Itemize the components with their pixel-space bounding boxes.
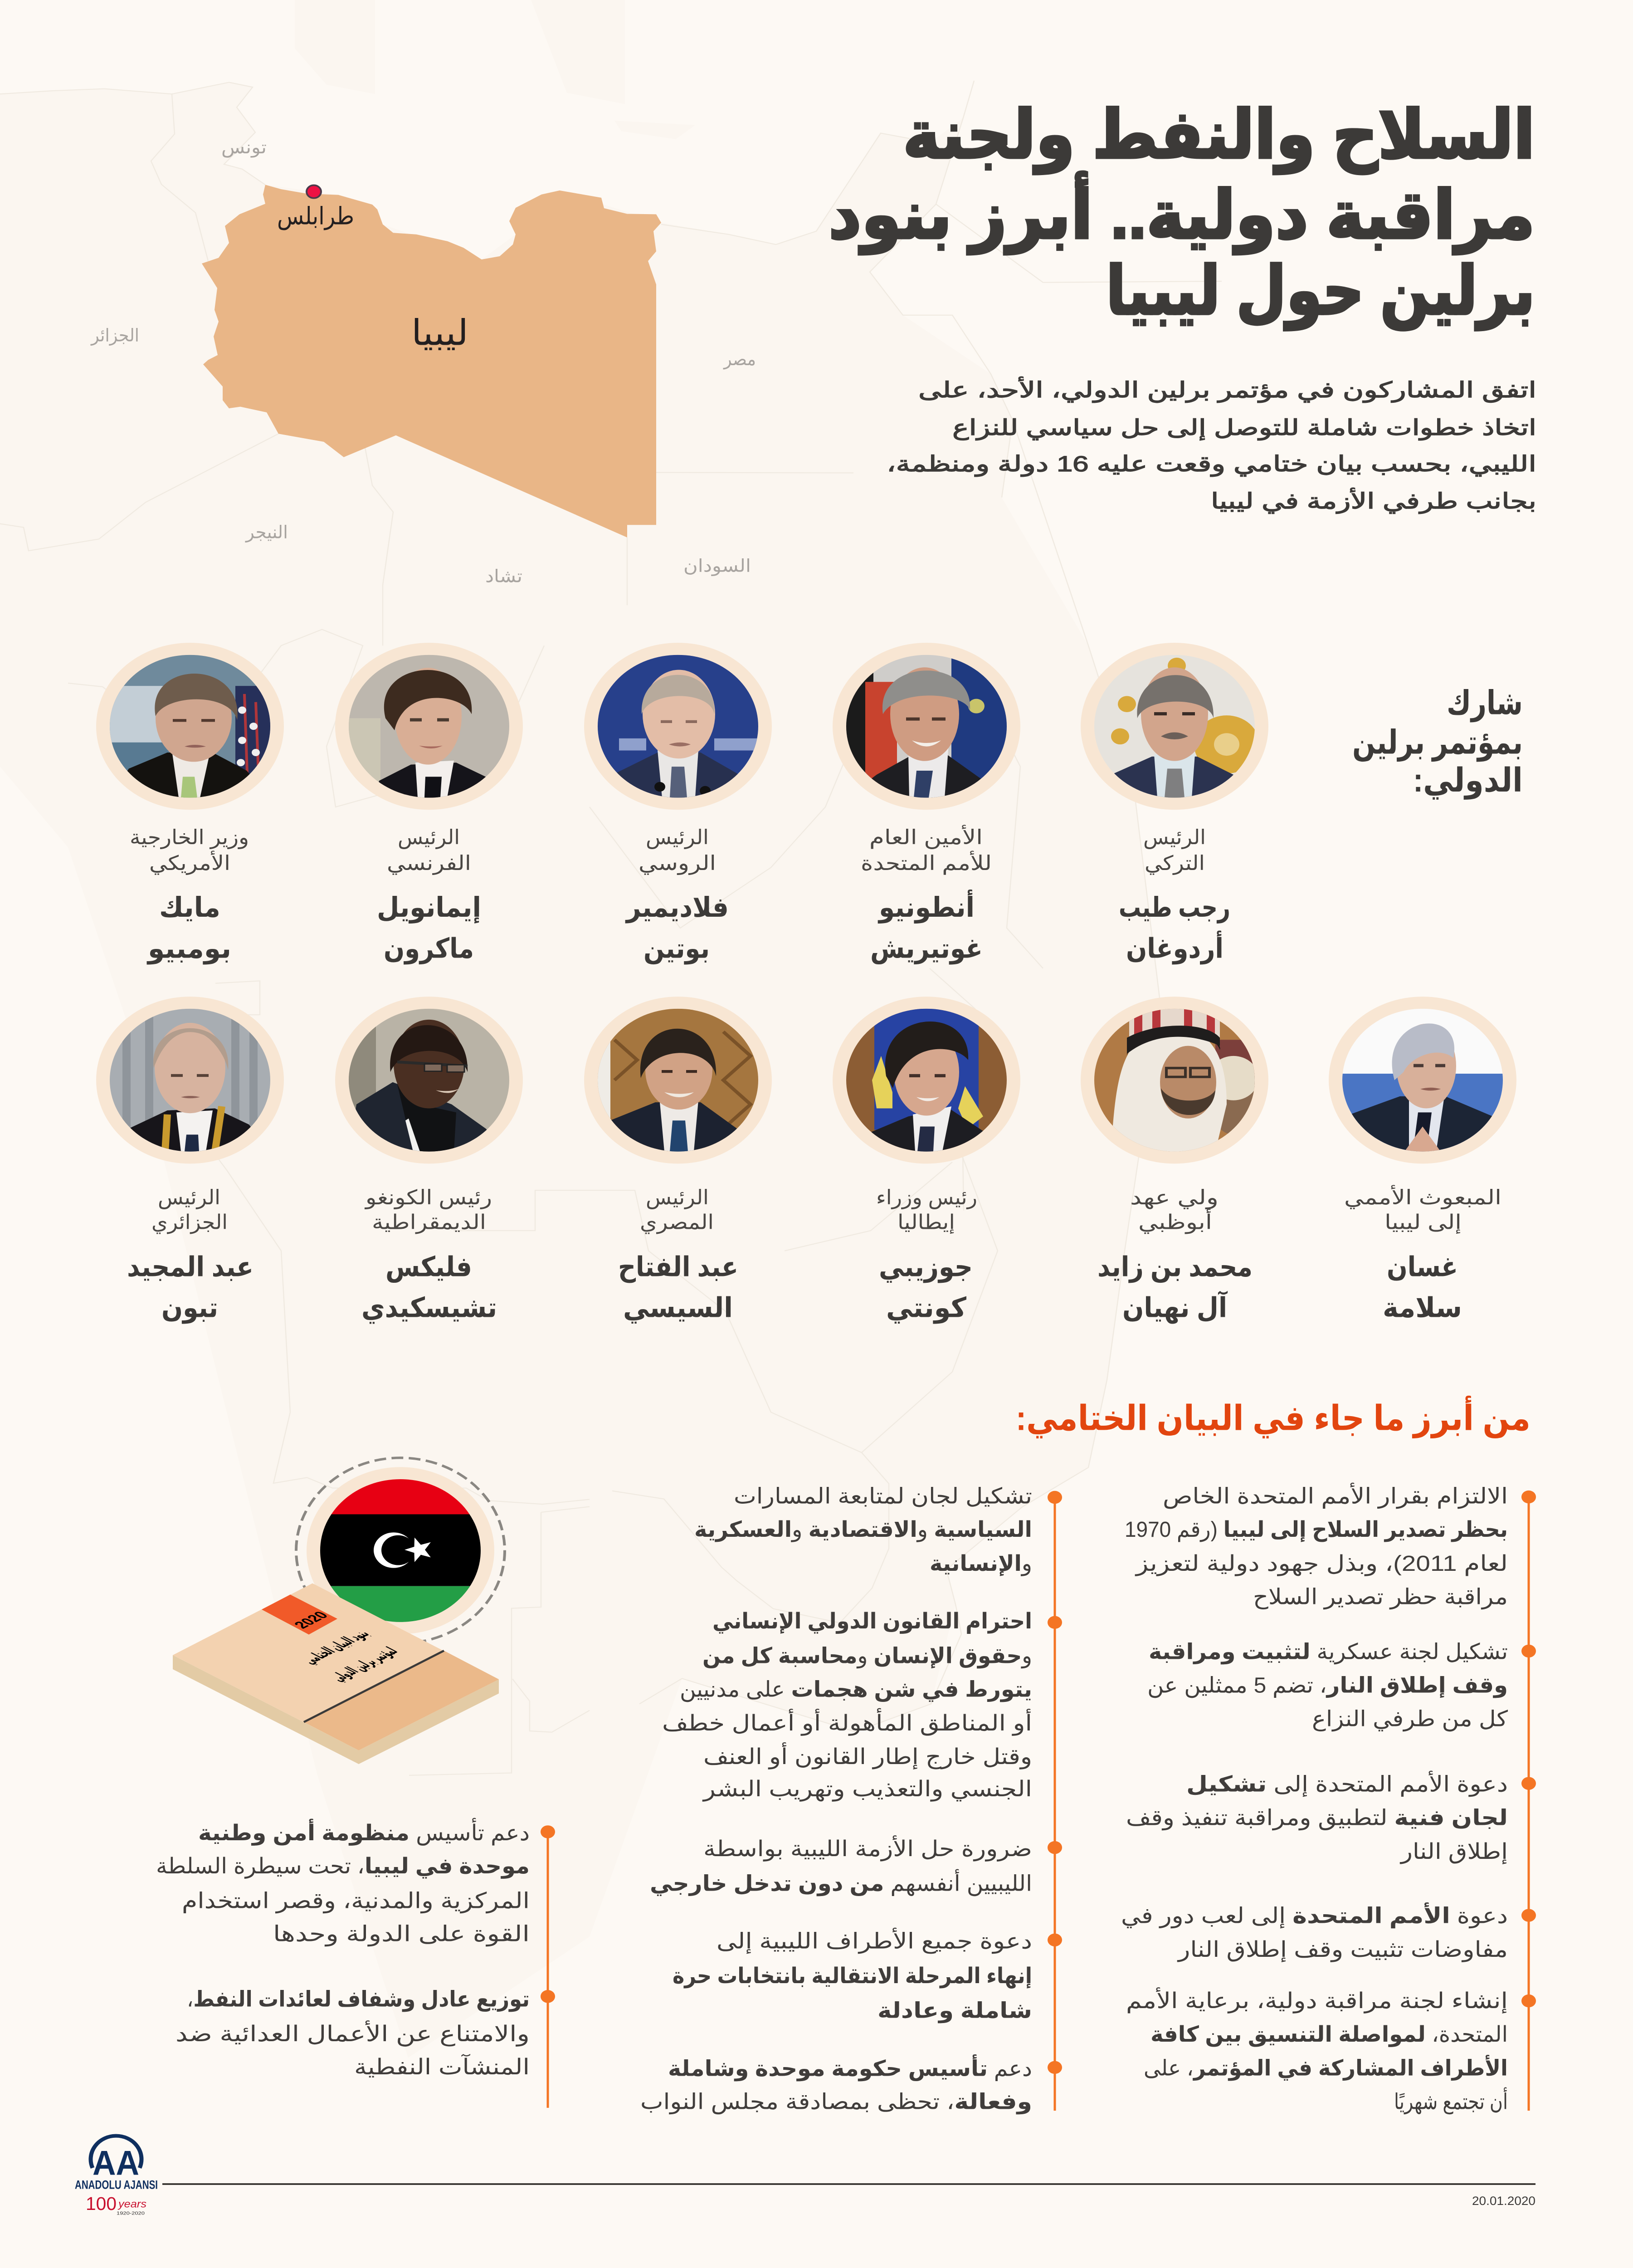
person: Macron (335, 643, 523, 965)
column: middle list (640, 1484, 1062, 2115)
person: Putin: بوتين (643, 933, 710, 965)
person: Tebboune: الرئيس (158, 1187, 220, 1210)
person: Erdogan: التركي (1145, 852, 1205, 875)
person: Pompeo: بومبيو (146, 933, 231, 965)
person: Sisi: الرئيس (646, 1187, 709, 1210)
participants heading (1352, 685, 1523, 800)
column: left list: دعم تأسيس منظومة أمن وطنية (198, 1818, 530, 1846)
column: right list: الأطراف المشاركة في المؤتمر، على (1144, 2055, 1508, 2081)
person: Macron: إيمانويل (377, 892, 481, 924)
neighbouring countries labels: مصر (723, 349, 756, 369)
person: Guterres: للأمم المتحدة (861, 850, 992, 875)
person: Conte (833, 997, 1020, 1324)
column: middle list: وحقوق الإنسان ومحاسبة كل من (702, 1643, 1032, 1669)
column: right list: دعوة الأمم المتحدة إلى لعب دور في (1121, 1902, 1508, 1929)
illustration: flag and document (173, 1458, 505, 1764)
intro text (887, 376, 1536, 514)
column: right list (1121, 1482, 1536, 2115)
column: middle list: دعم تأسيس حكومة موحدة وشاملة (668, 2054, 1032, 2082)
column: left list: المنشآت النفطية (354, 2054, 530, 2079)
column: middle list: يتورط في شن هجمات على مدنيين (680, 1677, 1032, 1702)
column: middle list: إنهاء المرحلة الانتقالية بانتخابات حرة (673, 1964, 1032, 1989)
person: Salame: سلامة (1383, 1292, 1462, 1323)
document (173, 1583, 499, 1764)
neighbouring countries labels: تونس (221, 137, 267, 157)
person: Guterres (833, 643, 1020, 965)
column: right list: لعام 2011)، وبذل جهود دولية لتعزيز (1135, 1551, 1508, 1576)
person: Mohammed bin Zayed: محمد بن زايد (1097, 1251, 1253, 1283)
column: middle list: وقتل خارج إطار القانون أو العنف (703, 1742, 1032, 1769)
person: Tshisekedi: تشيسكيدي (361, 1292, 497, 1324)
column: middle list: الليبيين أنفسهم من دون تدخل خارجي (650, 1869, 1032, 1897)
document: 2020 (290, 1609, 332, 1631)
column: left list: موحدة في ليبيا، تحت سيطرة السلطة (156, 1854, 530, 1879)
neighbouring countries labels (90, 137, 756, 586)
person: Tebboune: عبد المجيد (127, 1251, 253, 1282)
person: Putin (584, 643, 772, 965)
column: middle list: شاملة وعادلة (877, 1998, 1032, 2024)
person: Pompeo: مايك (159, 892, 220, 923)
column: right list: إنشاء لجنة مراقبة دولية، برعاية الأمم (1126, 1987, 1508, 2014)
person: Sisi: السيسي (623, 1292, 733, 1324)
column: right list: المتحدة، لمواصلة التنسيق بين كافة (1150, 2022, 1508, 2047)
column: right list: مراقبة حظر تصدير السلاح (1253, 1585, 1508, 1610)
person: Tshisekedi: فليكس (385, 1251, 472, 1283)
document: لمؤتمر برلين الدولي (326, 1645, 402, 1684)
logo: Anadolu Ajansi: 1920-2020 (117, 2211, 145, 2216)
neighbouring countries labels: النيجر (245, 522, 288, 543)
person: Tebboune: الجزائري (151, 1211, 228, 1234)
column: left list: القوة على الدولة وحدها (273, 1921, 530, 1947)
person: Mohammed bin Zayed (1081, 997, 1268, 1324)
column: middle list: أو المناطق المأهولة أو أعمال خطف (662, 1708, 1032, 1736)
column: right list: الالتزام بقرار الأمم المتحدة الخاص (1163, 1482, 1508, 1509)
person: Conte: كونتي (886, 1292, 967, 1324)
column: right list: دعوة الأمم المتحدة إلى تشكيل (1186, 1770, 1508, 1797)
person: Salame: المبعوث الأممي (1344, 1185, 1501, 1210)
person: Putin: فلاديمير (625, 892, 729, 924)
logo: Anadolu Ajansi: ANADOLU AJANSI (75, 2178, 158, 2192)
column: middle list: دعوة جميع الأطراف الليبية إلى (717, 1927, 1032, 1954)
person: Conte: جوزيبي (879, 1251, 973, 1283)
person: Pompeo: الأمريكي (149, 850, 230, 875)
column: middle list: وفعالة، تحظى بمصادقة مجلس النواب (640, 2089, 1032, 2115)
Libya shape (202, 185, 661, 538)
column: middle list: الجنسي والتعذيب وتهريب البشر (702, 1777, 1032, 1802)
person: Macron: ماكرون (384, 933, 474, 965)
neighbouring countries labels: تشاد (485, 566, 522, 586)
column: middle list: والإنسانية (930, 1551, 1032, 1576)
participants heading: شارك (1447, 685, 1523, 722)
person: Salame (1329, 997, 1516, 1323)
logo: Anadolu Ajansi (75, 2136, 158, 2216)
person: Tshisekedi: رئيس الكونغو (365, 1187, 492, 1210)
dashed ring (296, 1458, 505, 1643)
column: middle list: السياسية والاقتصادية والعسكرية (694, 1517, 1032, 1542)
document: بنود البيان الختامي (297, 1628, 373, 1667)
column: right list: كل من طرفي النزاع (1312, 1706, 1508, 1732)
intro text: الليبي، بحسب بيان ختامي وقعت عليه 16 دولة ومنظمة، (887, 452, 1536, 477)
person: Sisi: المصري (640, 1211, 714, 1234)
person: Conte: إيطاليا (897, 1211, 955, 1234)
person: Guterres: أنطونيو (877, 890, 975, 924)
person: Macron: الرئيس (398, 826, 460, 849)
column: right list: وقف إطلاق النار، تضم 5 ممثلين عن (1147, 1673, 1508, 1698)
person: Guterres: غوتيريش (870, 933, 983, 965)
logo: Anadolu Ajansi: 100 (86, 2194, 117, 2214)
title: مراقبة دولية.. أبرز بنود (829, 171, 1535, 254)
person: Macron: الفرنسي (387, 852, 471, 875)
person: Erdogan (1081, 643, 1268, 965)
map of Libya (90, 137, 756, 586)
person: Erdogan: أردوغان (1126, 931, 1224, 965)
column: right list: إطلاق النار (1399, 1839, 1508, 1864)
person: Putin: الرئيس (646, 826, 709, 849)
neighbouring countries labels: الجزائر (90, 325, 139, 346)
flag of Libya (307, 1467, 494, 1634)
person: Tebboune (96, 997, 284, 1324)
column: left list: المركزية والمدنية، وقصر استخدام (182, 1888, 530, 1914)
date: 20.01.2020 (1472, 2195, 1536, 2208)
column: middle list: ضرورة حل الأزمة الليبية بواسطة (703, 1835, 1032, 1862)
neighbouring countries labels: السودان (683, 556, 751, 576)
intro text: اتفق المشاركون في مؤتمر برلين الدولي، الأحد، على (918, 376, 1536, 403)
person: Erdogan: الرئيس (1143, 826, 1206, 849)
person: Tshisekedi (335, 997, 523, 1324)
column: left list (156, 1818, 555, 2108)
footer rule (162, 2183, 1536, 2185)
intro text: بجانب طرفي الأزمة في ليبيا (1211, 488, 1536, 514)
person: Guterres: الأمين العام (869, 825, 983, 849)
column: middle list: احترام القانون الدولي الإنساني (712, 1609, 1032, 1634)
person: Mohammed bin Zayed: ولي عهد (1130, 1187, 1219, 1210)
column: left list: توزيع عادل وشفاف لعائدات النفط، (187, 1987, 530, 2012)
person: Salame: إلى ليبيا (1384, 1211, 1462, 1234)
logo: Anadolu Ajansi: AA (93, 2144, 139, 2182)
Libya label: ليبيا (411, 313, 468, 352)
column: right list: تشكيل لجنة عسكرية لتثبيت ومراقبة (1149, 1639, 1508, 1665)
column: left list: والامتناع عن الأعمال العدائية ضد (175, 2020, 530, 2047)
participants heading: بمؤتمر برلين (1352, 724, 1523, 762)
column: right list: أن تجتمع شهريًا (1394, 2087, 1508, 2115)
column: right list: لجان فنية لتطبيق ومراقبة تنفيذ وقف (1126, 1805, 1508, 1831)
person: Pompeo (96, 643, 284, 965)
person: Sisi: عبد الفتاح (618, 1251, 738, 1283)
logo: Anadolu Ajansi: years (117, 2199, 146, 2210)
person: Putin: الروسي (639, 852, 716, 875)
column: right list: مفاوضات تثبيت وقف إطلاق النار (1177, 1937, 1508, 1962)
person: Mohammed bin Zayed: آل نهيان (1122, 1290, 1228, 1324)
person: Tebboune: تبون (161, 1292, 218, 1324)
column: middle list: تشكيل لجان لمتابعة المسارات (734, 1484, 1032, 1509)
column: right list: بحظر تصدير السلاح إلى ليبيا (رقم 1970 (1125, 1517, 1508, 1542)
person: Conte: رئيس وزراء (876, 1187, 977, 1210)
title (829, 98, 1535, 331)
Tripoli marker (307, 185, 321, 198)
person: Salame: غسان (1387, 1251, 1458, 1282)
person: Sisi (584, 997, 772, 1324)
person: Mohammed bin Zayed: أبوظبي (1138, 1208, 1212, 1234)
person: Pompeo: وزير الخارجية (130, 826, 249, 849)
participants heading: الدولي: (1413, 762, 1523, 800)
intro text: اتخاذ خطوات شاملة للتوصل إلى حل سياسي للنزاع (952, 415, 1536, 440)
person: Erdogan: رجب طيب (1119, 892, 1230, 924)
Tripoli label: طرابلس (277, 203, 354, 230)
person: Tshisekedi: الديمقراطية (372, 1211, 486, 1234)
